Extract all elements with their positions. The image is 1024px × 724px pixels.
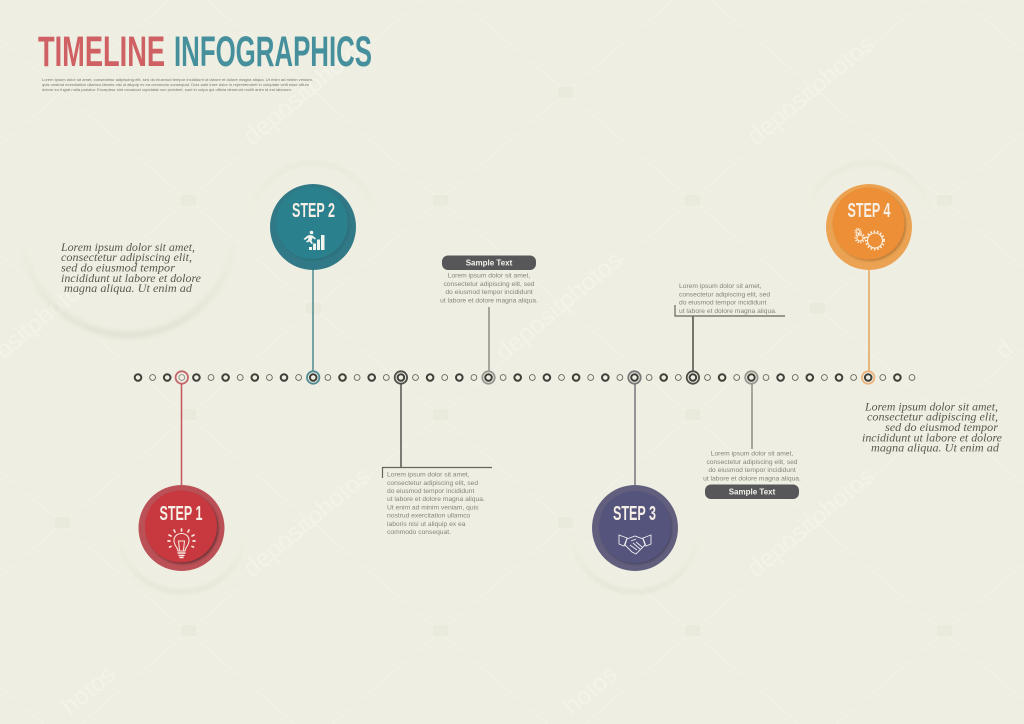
halo: step 2 (249, 163, 377, 291)
text block: top center: Lorem ipsum dolor sit amet, (448, 272, 530, 280)
step 2 badge: STEP 2 (292, 200, 335, 222)
left callout circle: Lorem ipsum dolor sit amet, (60, 242, 195, 254)
text block: lower right center: consectetur adipiscing elit, sed (706, 459, 798, 466)
watermark: d (990, 334, 1019, 365)
icon: runner and bars (304, 231, 324, 250)
text block: bracket below timeline: laboris nisi ut aliquip ex ea (387, 521, 466, 528)
highlighted timeline nodes (176, 371, 874, 384)
text block: top center: do eiusmod tempor incididunt (445, 289, 533, 296)
text block: bracket above timeline: Lorem ipsum dolor sit amet, (679, 283, 762, 290)
icon: light bulb (168, 529, 195, 558)
right script text: sed do eiusmod tempor (885, 422, 999, 434)
label: sample text top (442, 256, 536, 270)
text block: lower right center: ut labore et dolore magna aliqua. (703, 476, 801, 482)
step 3 badge (592, 485, 678, 571)
text block: lower right center (703, 450, 801, 482)
step 1 badge (138, 485, 224, 571)
icon: gears (855, 228, 884, 250)
text block: bracket above timeline: consectetur adipiscing elit, sed (679, 291, 770, 298)
left callout circle: magna aliqua. Ut enim ad (64, 283, 192, 295)
step 4 badge (826, 184, 912, 270)
timeline dots (135, 374, 915, 381)
text block: bracket below timeline: ut labore et dolore magna aliqua. (387, 496, 485, 503)
text block: top center: consectetur adipiscing elit, sed (443, 281, 535, 288)
watermark: depositphotos (742, 30, 880, 151)
text block: bracket below timeline: Ut enim ad minim veniam, quis (387, 504, 479, 511)
label: sample text top: Sample Text (466, 258, 513, 268)
left callout circle: sed do eiusmod tempor (61, 262, 176, 274)
text block: bracket below timeline: consectetur adipiscing elit, sed (387, 480, 478, 487)
subtitle text: dolore eu fugiat nulla pariatur. Excepteur sint occaecat cupidatat non proident, sunt in culpa qui officia deserunt mollit anim id est laborum. (42, 87, 292, 92)
text block: bracket below timeline (382, 468, 492, 536)
left callout circle (21, 121, 235, 335)
text block: bracket above timeline: ut labore et dolore magna aliqua. (679, 308, 777, 315)
step 1 badge: STEP 1 (160, 503, 202, 525)
title (38, 28, 372, 76)
title: TIMELINE (38, 28, 165, 76)
halo: step 1 (118, 464, 246, 592)
text block: lower right center: do eiusmod tempor incididunt (708, 467, 796, 474)
halo: step 4 (805, 163, 933, 291)
connector lines (182, 268, 869, 486)
text block: top center (440, 272, 538, 304)
title: INFOGRAPHICS (174, 28, 372, 76)
subtitle text (42, 77, 313, 92)
left callout circle: consectetur adipiscing elit, (61, 252, 192, 264)
text block: bracket below timeline: nostrud exercitation ullamco (387, 513, 471, 520)
watermark camera icons (55, 87, 952, 636)
watermark: depositphotos (238, 462, 376, 583)
text block: bracket below timeline: do eiusmod tempor incididunt (387, 488, 475, 495)
text block: bracket below timeline: Lorem ipsum dolor sit amet, (387, 472, 470, 478)
watermark: hotos (558, 660, 623, 721)
label: sample text bottom (705, 484, 799, 499)
text block: bracket above timeline: do eiusmod tempor incididunt (679, 300, 767, 306)
watermark: depositphotos (490, 246, 628, 367)
right script text: consectetur adipiscing elit, (867, 412, 998, 424)
label: sample text bottom: Sample Text (729, 488, 776, 496)
step 2 badge (270, 184, 356, 270)
left callout circle: incididunt ut labore et dolore (61, 273, 201, 285)
right script text: magna aliqua. Ut enim ad (871, 442, 999, 454)
halo: step 3 (571, 464, 699, 592)
icon: handshake (619, 535, 651, 554)
step 3 badge: STEP 3 (613, 503, 656, 525)
text block: top center: ut labore et dolore magna aliqua. (440, 297, 538, 304)
right script text: incididunt ut labore et dolore (862, 432, 1002, 444)
text block: bracket below timeline: commodo consequat. (387, 529, 451, 536)
watermark: hotos (56, 660, 121, 721)
text block: bracket above timeline (675, 283, 785, 316)
subtitle text: quis nostrud exercitation ullamco laboris nisi ut aliquip ex ea commodo consequat. Duis aute irure dolor in reprehenderit in voluptate velit esse cillum (42, 82, 309, 87)
right script text: Lorem ipsum dolor sit amet, (864, 402, 998, 414)
watermark: depositphotos (742, 462, 880, 583)
subtitle text: Lorem ipsum dolor sit amet, consectetur adipiscing elit, sed do eiusmod tempor incididunt ut labore et dolore magna aliqua. Ut enim ad minim veniam, (42, 77, 313, 82)
watermark: depositphotos (238, 30, 376, 151)
step 4 badge: STEP 4 (848, 200, 891, 222)
right script text (862, 402, 1002, 454)
text block: lower right center: Lorem ipsum dolor sit amet, (711, 450, 793, 458)
